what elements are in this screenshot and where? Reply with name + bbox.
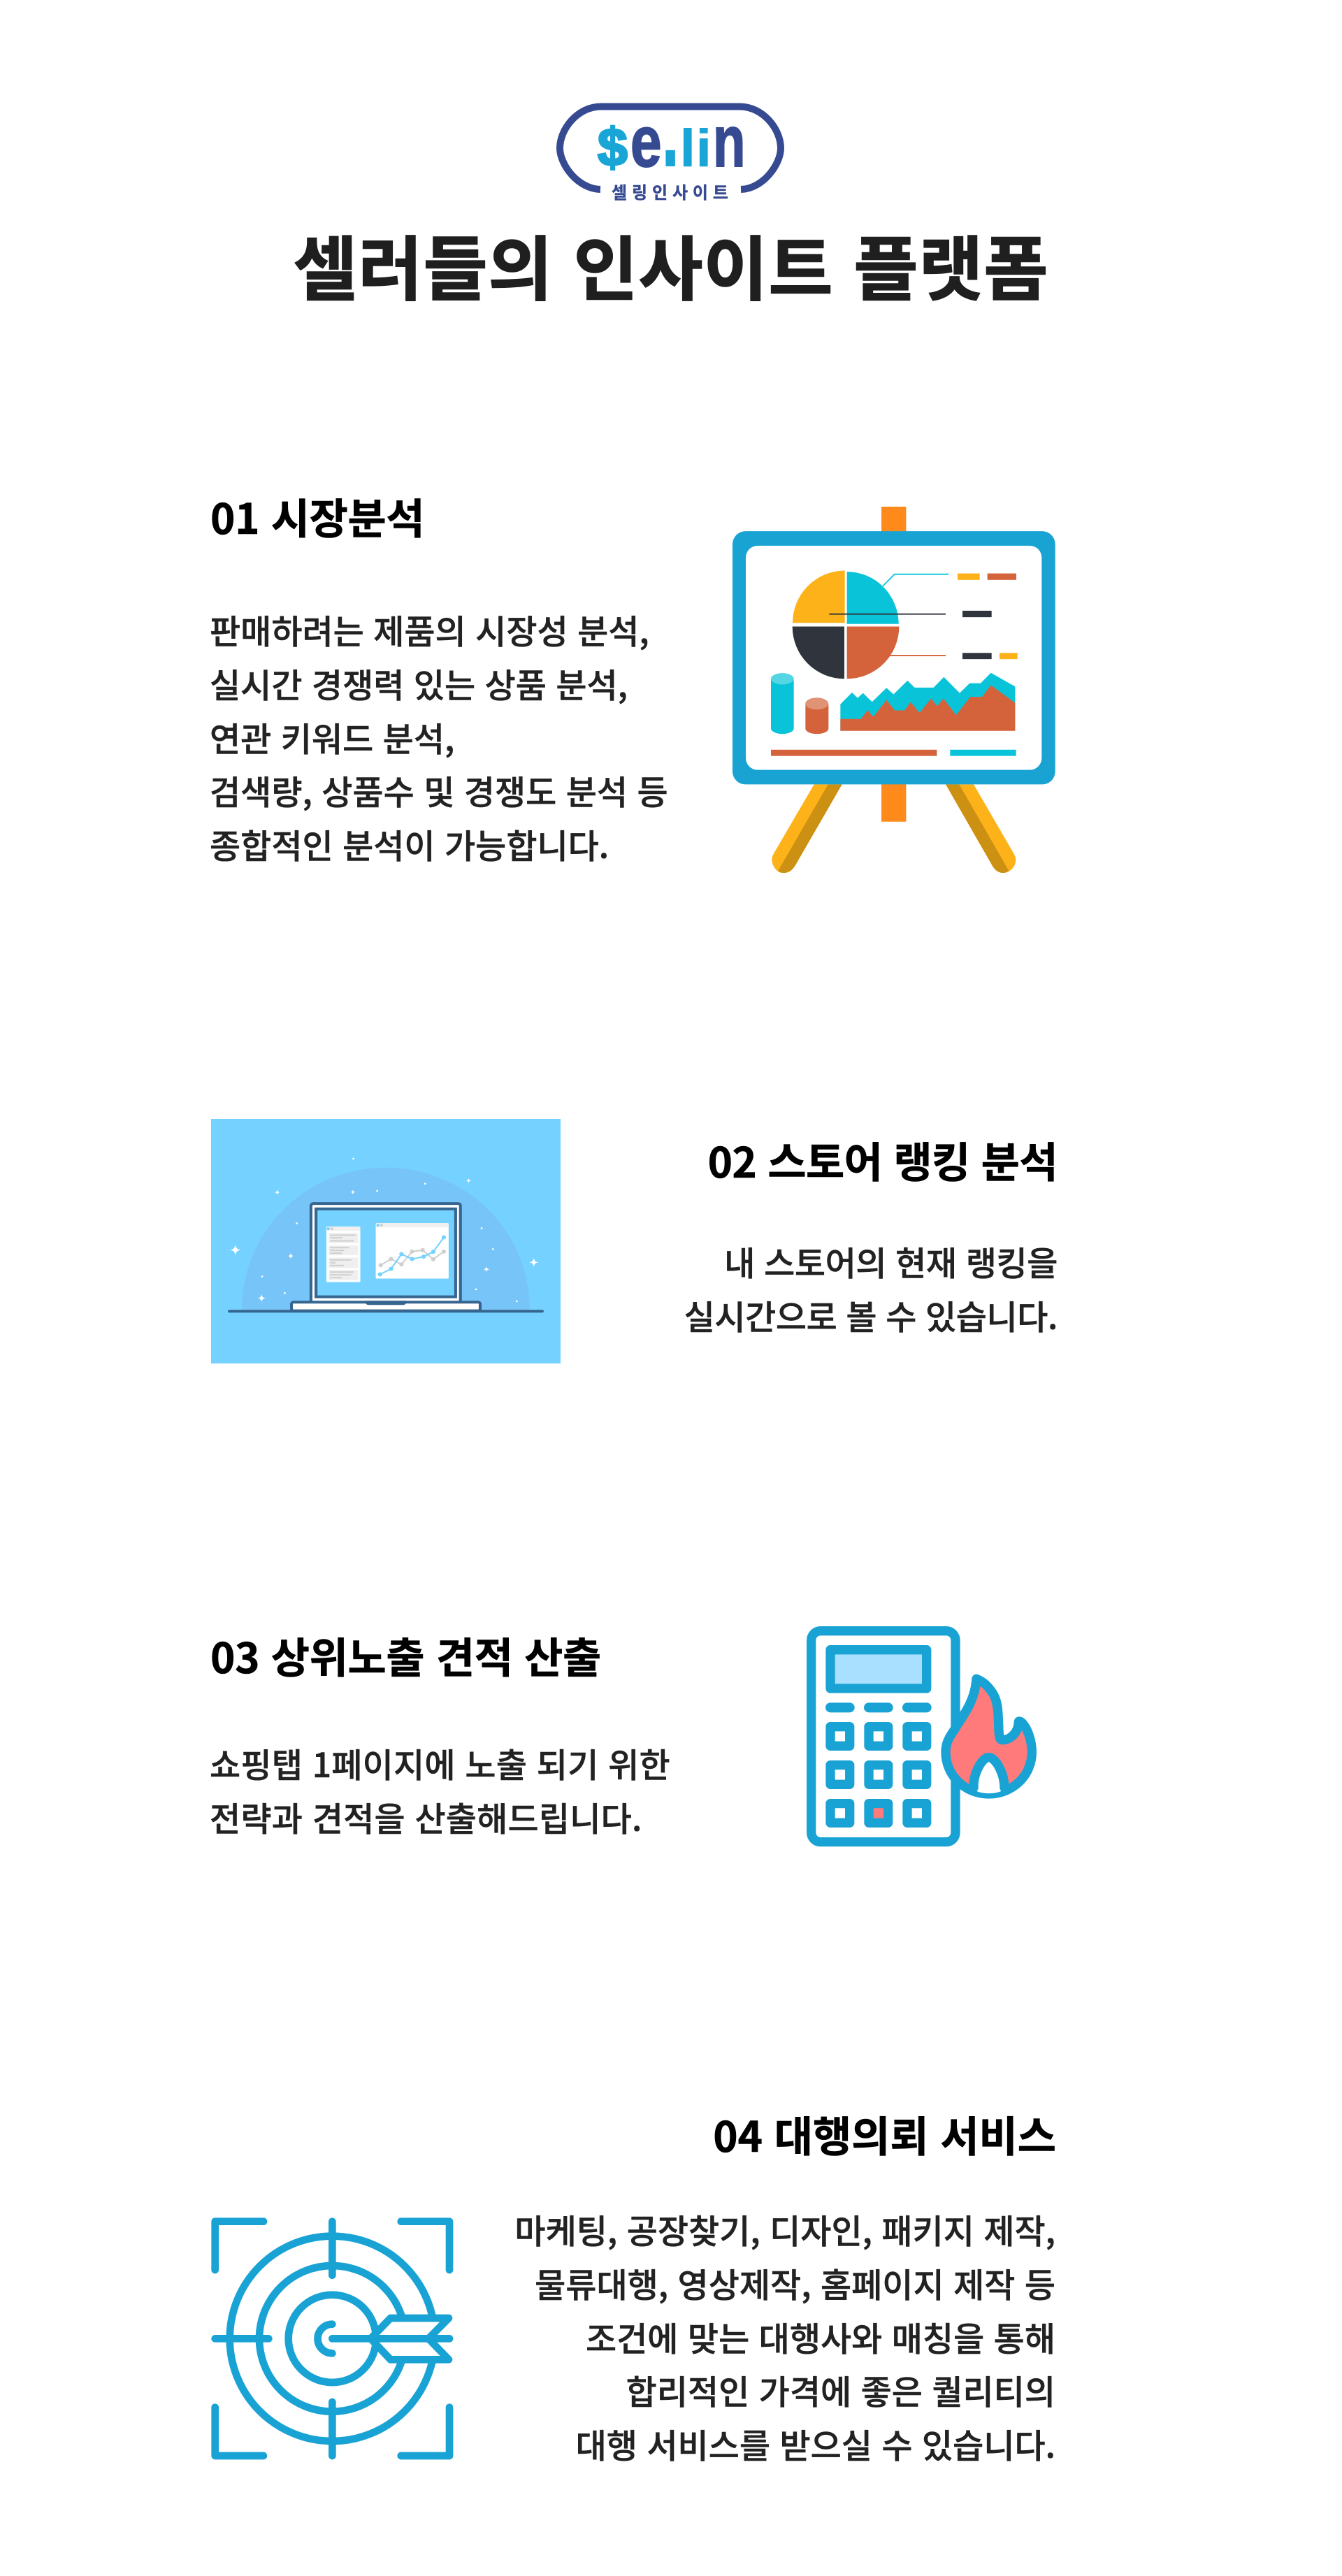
ground line: [229, 1307, 542, 1315]
logo: selin: [556, 69, 784, 203]
section 01 heading: 01 시장분석: [210, 486, 424, 547]
section 04 text: 물류대행, 영상제작, 홈페이지 제작 등: [535, 2258, 1055, 2307]
icon: presentation easel: [733, 507, 1055, 873]
logo wordmark: l: [679, 119, 696, 178]
panel background: [211, 1119, 561, 1363]
pie chart: [793, 571, 948, 679]
dome: [242, 1168, 530, 1310]
calculator display: [830, 1650, 927, 1688]
section 01 text: [210, 605, 668, 868]
section 04 text: 조건에 맞는 대행사와 매칭을 통해: [586, 2312, 1055, 2361]
arrow: [332, 2318, 453, 2360]
section 02 text: 실시간으로 볼 수 있습니다.: [684, 1290, 1058, 1339]
section 04 text: 마케팅, 공장찾기, 디자인, 패키지 제작,: [514, 2204, 1055, 2253]
target rings: [229, 2236, 435, 2441]
section 04 heading: 04 대행의뢰 서비스: [713, 2104, 1056, 2164]
title: 셀러들의 인사이트 플랫폼: [294, 213, 1048, 314]
corner brackets: [215, 2222, 449, 2456]
logo wordmark: e: [630, 101, 661, 182]
easel legs: [772, 785, 1016, 873]
section 04 text: [514, 2204, 1055, 2468]
laptop: [291, 1203, 480, 1311]
calculator number keys: [830, 1727, 927, 1823]
section 02 text: 내 스토어의 현재 랭킹을: [724, 1236, 1058, 1285]
icon: calculator with flame: [807, 1626, 1037, 1846]
logo wordmark: i: [695, 119, 712, 178]
logo wordmark: n: [713, 102, 745, 182]
logo wordmark: [598, 69, 745, 190]
calculator body: [811, 1631, 955, 1842]
stars: [229, 1158, 539, 1303]
section 01 text: 실시간 경쟁력 있는 상품 분석,: [210, 658, 628, 707]
section 03 heading: 03 상위노출 견적 산출: [210, 1625, 601, 1686]
area chart: [841, 673, 1016, 731]
logo pill outline: [560, 106, 781, 189]
chart legend bars: [958, 574, 1018, 659]
cylinders: [771, 673, 829, 734]
section 02 heading: 02 스토어 랭킹 분석: [708, 1129, 1058, 1190]
window: line chart: [376, 1223, 449, 1279]
window: list: [326, 1227, 360, 1282]
logo subtitle: 셀링인사이트: [612, 179, 728, 203]
section 03 text: 쇼핑탭 1페이지에 노출 되기 위한: [210, 1738, 670, 1787]
section 01 text: 연관 키워드 분석,: [210, 712, 454, 761]
illustration: laptop with charts: [211, 1119, 561, 1363]
section 02 text: [684, 1236, 1058, 1339]
flame: [946, 1679, 1032, 1794]
bottom bars: [771, 750, 1016, 756]
section 01 text: 판매하려는 제품의 시장성 분석,: [210, 605, 649, 653]
logo wordmark: .: [661, 69, 679, 190]
calculator operator keys: [830, 1693, 927, 1723]
section 03 text: [210, 1738, 670, 1841]
board: [733, 531, 1055, 785]
section 01 text: 종합적인 분석이 가능합니다.: [210, 819, 609, 868]
section 04 text: 대행 서비스를 받으실 수 있습니다.: [576, 2419, 1055, 2468]
crosshair ticks: [215, 2222, 332, 2456]
easel post: [881, 507, 907, 822]
logo wordmark: $: [598, 118, 628, 178]
icon: target with arrow: [211, 2217, 453, 2460]
section 04 text: 합리적인 가격에 좋은 퀄리티의: [626, 2365, 1055, 2414]
section 03 text: 전략과 견적을 산출해드립니다.: [210, 1792, 642, 1841]
section 01 text: 검색량, 상품수 및 경쟁도 분석 등: [210, 765, 668, 814]
